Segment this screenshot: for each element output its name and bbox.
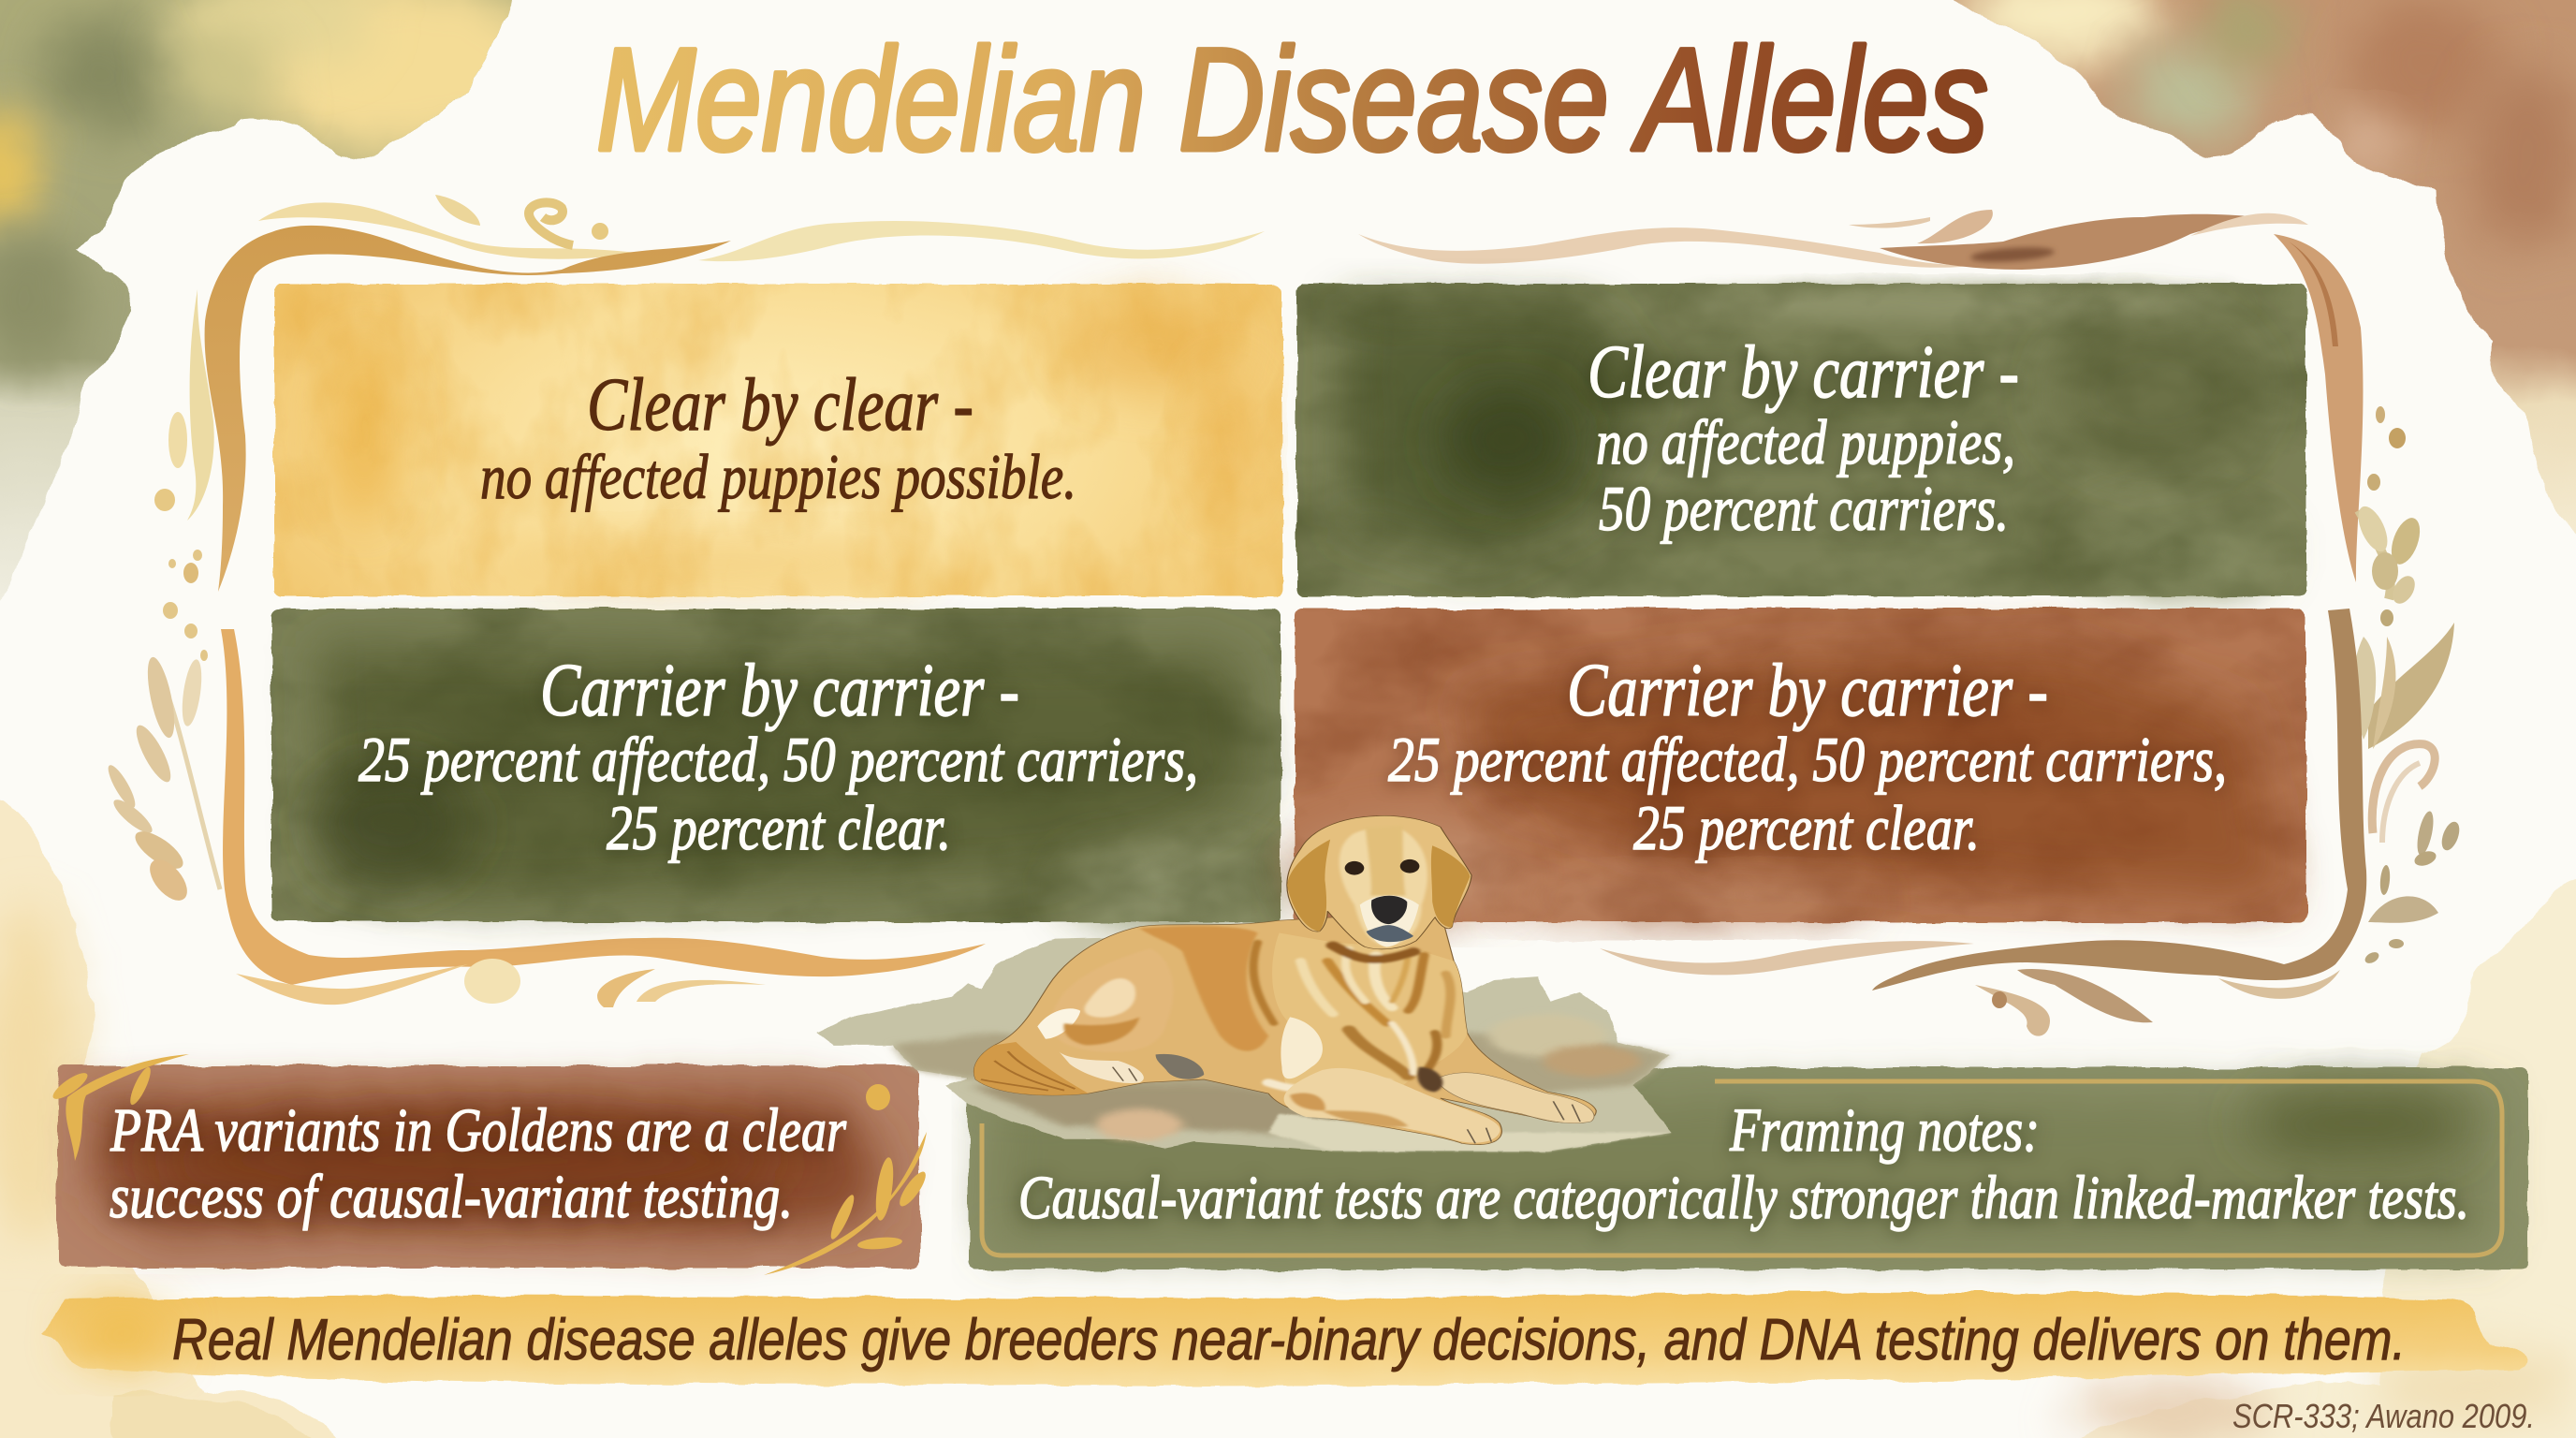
panel text: no affected puppies, — [1596, 406, 2015, 477]
ground wash — [817, 936, 1672, 1152]
callout text — [110, 1096, 846, 1231]
fur streaks — [1253, 942, 1451, 1091]
ornamental sprig: right — [2342, 502, 2463, 965]
gold sprigs on callout — [50, 1054, 929, 1275]
nose and mouth — [1371, 896, 1407, 924]
ornamental sprig: left — [104, 655, 220, 907]
panel text: Clear by carrier - — [1588, 331, 2019, 414]
watercolor wash: bottom right corner — [2012, 871, 2576, 1438]
watercolor wash: top left corner — [0, 0, 552, 618]
illustration: golden retriever lying down — [817, 815, 1672, 1152]
hind leg — [1051, 948, 1173, 1052]
panel fill: olive wash — [968, 1067, 2528, 1269]
chest fur — [1272, 933, 1468, 1098]
paw toes — [1113, 1067, 1580, 1143]
panel fill: olive wash — [271, 609, 1281, 927]
face — [1339, 828, 1427, 946]
panel: clear by carrier — [1296, 284, 2306, 596]
title: Mendelian Disease Alleles — [596, 19, 1988, 182]
panel text: no affected puppies possible. — [480, 441, 1076, 512]
watercolor wash: bottom left corner — [0, 805, 356, 1438]
panel text: Clear by clear - — [587, 364, 973, 447]
gold inner border — [982, 1081, 2502, 1255]
back shading — [1139, 926, 1268, 1051]
panel text: Framing notes: — [1729, 1096, 2040, 1165]
bottom banner — [41, 1293, 2527, 1386]
panel fill: yellow wash — [274, 284, 1282, 596]
panel text — [1018, 1096, 2469, 1232]
panel text — [1388, 650, 2227, 863]
panel text: 25 percent clear. — [607, 792, 951, 863]
citation: SCR-333; Awano 2009. — [2232, 1397, 2535, 1435]
panel: carrier by carrier, brown — [1292, 609, 2306, 922]
head — [1287, 815, 1471, 949]
panel: PRA variants callout — [50, 1054, 929, 1275]
panel text — [1588, 331, 2019, 544]
panel text — [480, 364, 1076, 512]
callout text: PRA variants in Goldens are a clear — [110, 1096, 846, 1165]
panel: clear by clear — [274, 284, 1282, 596]
ornamental frame: top left — [154, 195, 1265, 661]
panel text: 25 percent clear. — [1633, 792, 1980, 863]
ornamental frame: bottom right — [1600, 609, 2366, 1036]
panel text — [359, 650, 1198, 863]
panel text: 25 percent affected, 50 percent carriers, — [1388, 724, 2227, 795]
panel fill: olive wash — [1296, 284, 2306, 596]
body — [974, 911, 1596, 1145]
panel text: 50 percent carriers. — [1599, 473, 2009, 544]
callout text: success of causal-variant testing. — [110, 1163, 793, 1231]
ornamental frame: top right — [1358, 210, 2406, 582]
ornamental frame: bottom left — [221, 629, 986, 1007]
watercolor wash: top right corner — [1954, 0, 2576, 534]
panel text: 25 percent affected, 50 percent carriers, — [359, 724, 1198, 795]
small back paw — [1156, 1054, 1204, 1079]
banner fill: yellow brush stroke — [41, 1293, 2527, 1386]
panel text: Carrier by carrier - — [1567, 650, 2048, 732]
panel: carrier by carrier, olive — [271, 609, 1281, 927]
panel fill: brown wash — [57, 1065, 919, 1268]
panel fill: brown wash — [1292, 609, 2306, 922]
eyes — [1345, 859, 1419, 875]
front legs — [1284, 1068, 1500, 1143]
panel text: Carrier by carrier - — [540, 650, 1019, 732]
ears — [1287, 840, 1330, 932]
tail — [974, 1042, 1089, 1095]
panel: framing notes — [968, 1067, 2528, 1269]
